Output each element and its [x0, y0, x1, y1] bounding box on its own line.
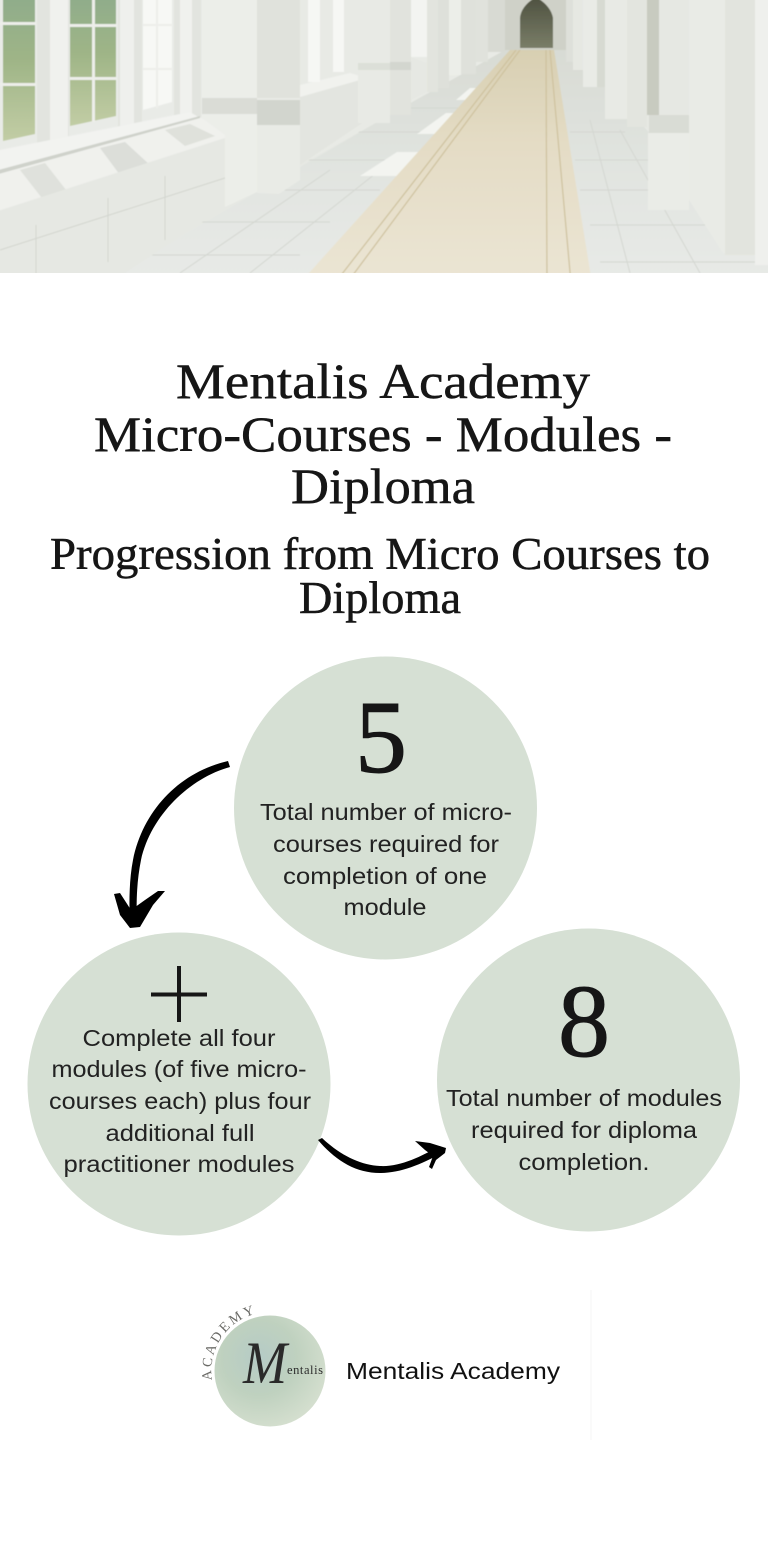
description: micro-courses: courses required for [273, 831, 499, 857]
floor [391, 50, 626, 127]
sun patches on floor [360, 88, 480, 176]
circle: complete all modules [28, 932, 330, 1236]
subtitle: Diploma [299, 573, 461, 623]
hero photo: white stone corridor [0, 0, 768, 283]
description: modules: practitioner modules [64, 1151, 294, 1177]
title: Micro-Courses - Modules - [94, 406, 672, 462]
description: modules: Complete all four [82, 1025, 276, 1051]
description: micro-courses [260, 799, 512, 920]
logo script initial: M [242, 1330, 290, 1396]
title: Diploma [291, 458, 475, 514]
logo arc text: ACADEMY [202, 1305, 252, 1380]
logo word: entalis [287, 1363, 323, 1377]
left window wall: near section [0, 0, 225, 283]
brand name: Mentalis Academy [346, 1358, 561, 1384]
title [94, 353, 672, 514]
carpet [300, 50, 592, 283]
description: modules: additional full [106, 1120, 254, 1146]
description: modules: courses each) plus four [49, 1088, 311, 1114]
number 8: 8 [558, 964, 610, 1079]
description: modules [49, 1025, 311, 1177]
columns [202, 98, 300, 191]
plus sign [151, 966, 207, 1022]
title: Mentalis Academy [176, 353, 590, 409]
circle: modules for diploma [437, 928, 740, 1232]
description: diploma: completion. [518, 1149, 650, 1175]
description: diploma: Total number of modules [446, 1085, 722, 1111]
logo: Mentalis watercolor circle [202, 1305, 326, 1426]
circle: micro-courses per module [234, 656, 537, 960]
subtitle: Progression from Micro Courses to [50, 529, 710, 579]
far end arch [505, 0, 566, 50]
subtitle [50, 529, 710, 623]
description: diploma [446, 1085, 722, 1175]
description: micro-courses: completion of one [283, 863, 487, 889]
left window wall: far section [300, 0, 505, 165]
description: modules: modules (of five micro- [52, 1056, 306, 1082]
description: micro-courses: Total number of micro- [260, 799, 512, 825]
right columns [566, 0, 768, 265]
description: micro-courses: module [344, 894, 426, 920]
description: diploma: required for diploma [471, 1117, 697, 1143]
number 5: 5 [355, 680, 407, 795]
arrow: from plus circle to 8 circle [318, 1138, 446, 1173]
arrow: from 5 circle down to plus circle [114, 761, 230, 928]
